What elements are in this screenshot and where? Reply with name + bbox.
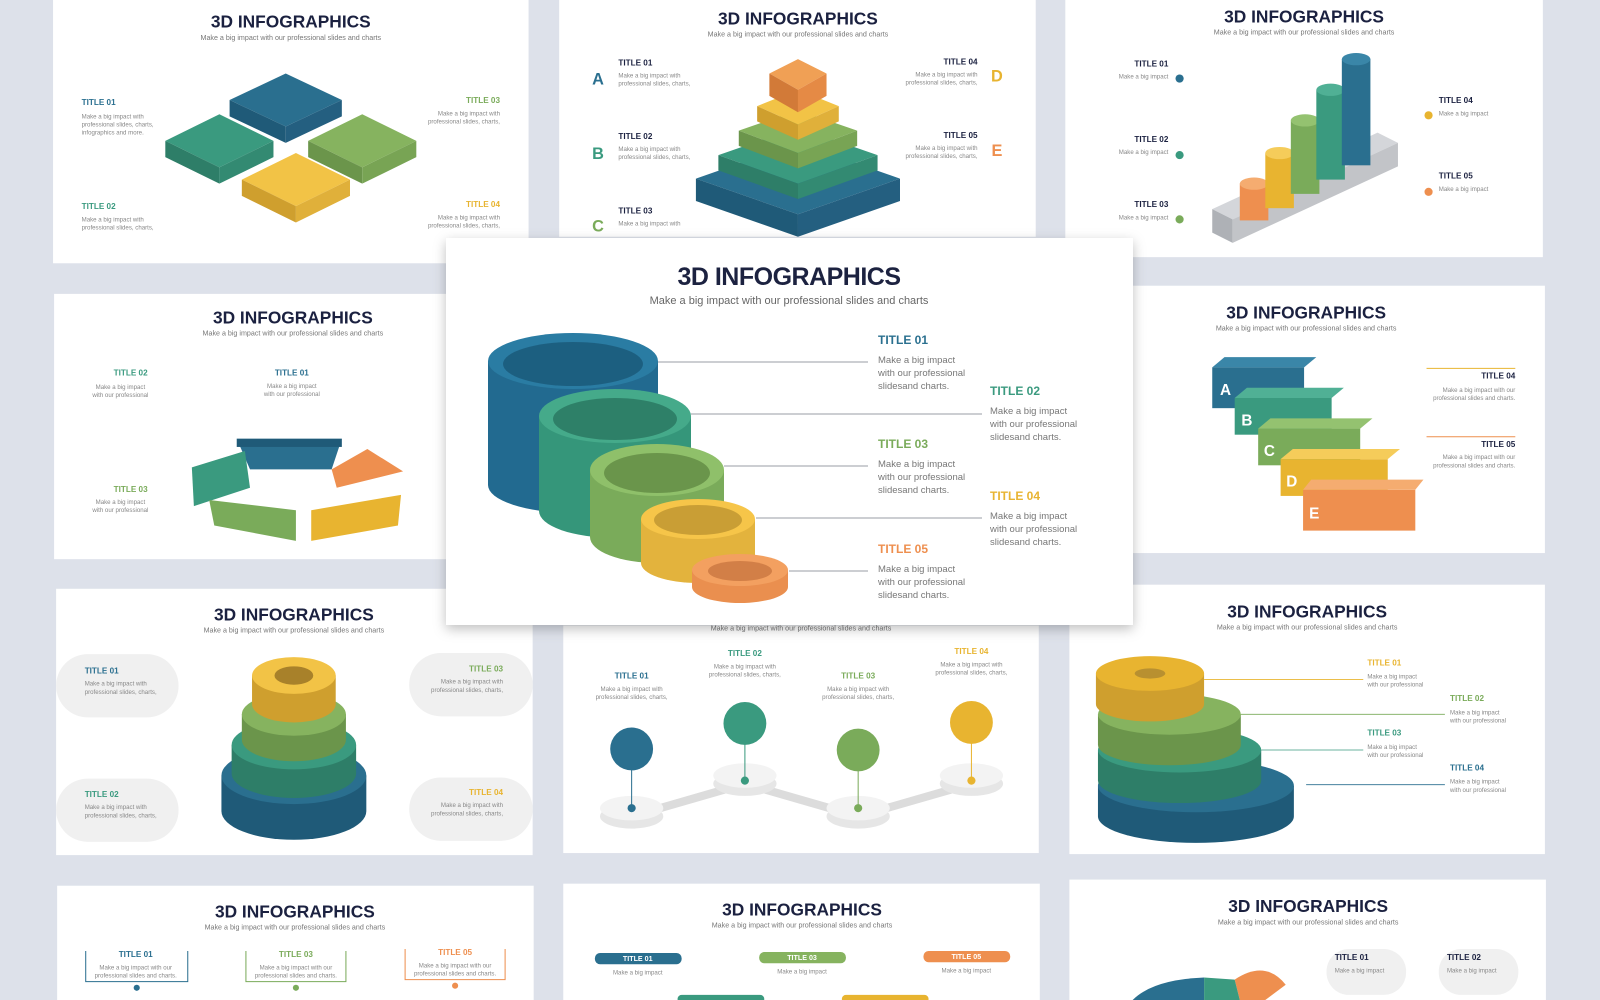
- panel: timeline slide: TITLE 04: [954, 647, 989, 656]
- panel: bottom-left slide: Make a big impact with our: [419, 962, 491, 969]
- panel: bar cylinders slide: TITLE 02: [1134, 135, 1169, 144]
- panel: pyramid slide: professional slides, charts,: [906, 80, 978, 87]
- panel: bottom-middle slide: 3D INFOGRAPHICS: [722, 899, 882, 919]
- panel: bottom-right slide: [1069, 880, 1546, 1000]
- panel: timeline slide: Make a big impact with: [827, 686, 889, 693]
- panel: bottom-left slide: Make a big impact with our: [99, 964, 172, 971]
- panel: bottom-left slide: professional slides and charts.: [255, 973, 337, 980]
- text: title 05: with our professional: [877, 577, 965, 588]
- text: title 05: TITLE 05: [878, 542, 928, 556]
- text: title 04: with our professional: [989, 524, 1077, 535]
- panel: timeline slide: TITLE 02: [728, 649, 762, 658]
- cylinder 1: [488, 333, 658, 513]
- panel: stacked discs slide: 3D INFOGRAPHICS: [1227, 601, 1387, 621]
- panel: steps slide: TITLE 04: [1481, 372, 1516, 381]
- panel: bottom-middle slide: [563, 884, 1040, 1000]
- panel: bottom-left slide: [57, 886, 534, 1000]
- panel: bar cylinders slide: Make a big impact: [1119, 149, 1169, 156]
- panel: steps slide: Make a big impact with our: [1443, 454, 1515, 461]
- panel: ring stack slide: TITLE 01: [85, 666, 119, 675]
- panel: puzzle slide: Make a big impact with: [438, 110, 500, 117]
- panel: bar cylinders slide: TITLE 01: [1134, 59, 1169, 68]
- panel: pyramid slide: [559, 0, 1036, 237]
- panel: puzzle slide: TITLE 02: [82, 202, 116, 211]
- panel: pyramid slide: TITLE 05: [944, 131, 978, 140]
- panel: pyramid slide: D: [991, 68, 1003, 86]
- panel: timeline slide: TITLE 01: [615, 672, 649, 681]
- panel: stacked discs slide: TITLE 02: [1450, 694, 1484, 703]
- text: title 04: [989, 489, 1077, 548]
- panel: bottom-right slide: TITLE 02: [1447, 953, 1481, 962]
- subtitle: Make a big impact with our professional slides and charts: [650, 295, 929, 307]
- text: title 05: Make a big impact: [878, 564, 955, 575]
- panel: bar cylinders slide: TITLE 04: [1439, 96, 1473, 105]
- panel: ring stack slide: 3D INFOGRAPHICS: [214, 604, 374, 624]
- panel: ring stack slide: TITLE 02: [85, 790, 119, 799]
- panel: timeline slide: professional slides, charts,: [709, 672, 781, 679]
- panel: bar cylinders slide: Make a big impact: [1119, 214, 1169, 221]
- panel: ring stack slide: professional slides, charts,: [431, 810, 503, 817]
- panel: pyramid slide: Make a big impact with: [915, 72, 978, 79]
- panel: pyramid slide: Make a big impact with: [618, 221, 681, 228]
- panel: pyramid slide: B: [592, 145, 604, 163]
- panel: bottom-left slide: professional slides and charts.: [414, 971, 496, 978]
- panel: steps slide: professional slides and charts.: [1433, 462, 1516, 469]
- panel: timeline slide: Make a big impact with: [940, 661, 1002, 668]
- panel: pyramid slide: TITLE 02: [618, 132, 653, 141]
- panel: bar cylinders slide: Make a big impact: [1439, 186, 1489, 193]
- panel: steps slide: Make a big impact with our: [1443, 387, 1515, 394]
- panel: stacked discs slide: Make a big impact: [1367, 744, 1417, 751]
- panel: stacked discs slide: Make a big impact: [1450, 779, 1500, 786]
- panel: stacked discs slide: with our professional: [1449, 717, 1506, 724]
- panel: donut slide: 3D INFOGRAPHICS: [213, 307, 373, 327]
- connector lines: [658, 362, 982, 571]
- panel: ring stack slide: Make a big impact with: [85, 804, 147, 811]
- panel: bottom-right slide: Make a big impact with our professional slides and charts: [1218, 918, 1399, 926]
- panel: steps slide: 3D INFOGRAPHICS: [1226, 302, 1386, 322]
- panel: pyramid slide: E: [991, 142, 1002, 160]
- panel: steps slide: A: [1220, 382, 1231, 399]
- panel: timeline slide: professional slides, charts,: [596, 694, 668, 701]
- text: title 04: Make a big impact: [990, 511, 1067, 522]
- text: title 02: slidesand charts.: [990, 432, 1061, 443]
- panel: bar cylinders slide: 3D INFOGRAPHICS: [1224, 6, 1384, 26]
- panel: puzzle slide: [53, 0, 529, 263]
- panel: ring stack slide: [56, 589, 533, 855]
- panel: bottom-right slide: 3D INFOGRAPHICS: [1228, 896, 1388, 916]
- panel: pyramid slide: professional slides, charts,: [618, 154, 691, 161]
- panel: bottom-left slide: TITLE 05: [438, 948, 473, 957]
- text: title 04: TITLE 04: [990, 489, 1040, 503]
- panel: bar cylinders slide: TITLE 05: [1439, 172, 1473, 181]
- panel: timeline slide: [563, 625, 1039, 853]
- panel: puzzle slide: Make a big impact with: [438, 214, 500, 221]
- panel: stacked discs slide: with our professional: [1449, 787, 1506, 794]
- panel: bottom-middle slide: Make a big impact: [777, 968, 827, 975]
- panel: ring stack slide: Make a big impact with our professional slides and charts: [204, 627, 385, 635]
- panel: stacked discs slide: Make a big impact with our professional slides and charts: [1217, 624, 1398, 632]
- text: title 03: [877, 437, 965, 496]
- panel: bottom-right slide: TITLE 01: [1335, 953, 1369, 962]
- panel: bottom-middle slide: TITLE 03: [787, 954, 817, 962]
- panel: donut slide: [54, 294, 531, 559]
- panel: pyramid slide: professional slides, charts,: [618, 81, 691, 88]
- panel: pyramid slide: TITLE 04: [944, 57, 978, 66]
- panel: bottom-left slide: professional slides and charts.: [95, 973, 177, 980]
- panel: bar cylinders slide: Make a big impact: [1439, 110, 1489, 117]
- text: title 01: with our professional: [877, 368, 965, 379]
- panel: bottom-middle slide: Make a big impact with our professional slides and charts: [712, 922, 893, 930]
- panel: steps slide: C: [1264, 443, 1275, 460]
- panel: puzzle slide: Make a big impact with: [82, 113, 144, 120]
- panel: donut slide: Make a big impact: [267, 383, 317, 390]
- panel: donut slide: TITLE 01: [275, 369, 309, 378]
- panel: bar cylinders slide: Make a big impact: [1119, 74, 1169, 81]
- panel: donut slide: Make a big impact with our professional slides and charts: [203, 330, 384, 338]
- panel: stacked discs slide: with our professional: [1366, 682, 1423, 689]
- panel: donut slide: Make a big impact: [96, 499, 145, 506]
- panel: puzzle slide: Make a big impact with: [82, 216, 144, 223]
- panel: pyramid slide: C: [592, 218, 604, 236]
- panel: bottom-left slide: TITLE 03: [279, 950, 313, 959]
- panel: pyramid slide: Make a big impact with: [915, 145, 978, 152]
- text: title 01: [877, 333, 965, 392]
- panel: donut slide: TITLE 02: [114, 369, 148, 378]
- panel: pyramid slide: Make a big impact with our professional slides and charts: [708, 31, 889, 39]
- text: title 03: Make a big impact: [878, 459, 955, 470]
- panel: timeline slide: TITLE 03: [841, 672, 876, 681]
- panel: bottom-right slide: Make a big impact: [1335, 967, 1385, 974]
- panel: bottom-left slide: Make a big impact with our: [260, 964, 332, 971]
- panel: pyramid slide: Make a big impact with: [618, 146, 681, 153]
- text: title 04: slidesand charts.: [990, 537, 1061, 548]
- panel: steps slide: TITLE 05: [1481, 440, 1516, 449]
- panel: steps slide: B: [1241, 413, 1252, 430]
- panel: donut slide: with our professional: [263, 391, 320, 398]
- panel: ring stack slide: TITLE 04: [469, 788, 504, 797]
- panel: pyramid slide: TITLE 01: [618, 58, 653, 67]
- panel: bar cylinders slide: Make a big impact with our professional slides and charts: [1214, 29, 1395, 37]
- panel: donut slide: with our professional: [91, 392, 148, 399]
- panel: steps slide: professional slides and charts.: [1433, 395, 1516, 402]
- panel: puzzle slide: TITLE 01: [82, 98, 116, 107]
- text: title 01: slidesand charts.: [878, 381, 949, 392]
- panel: bottom-left slide: 3D INFOGRAPHICS: [215, 901, 375, 921]
- panel: ring stack slide: professional slides, charts,: [85, 689, 157, 696]
- panel: ring stack slide: professional slides, charts,: [85, 812, 157, 819]
- panel: stacked discs slide: with our professional: [1366, 752, 1423, 759]
- panel: steps slide: Make a big impact with our professional slides and charts: [1216, 325, 1397, 333]
- panel: donut slide: Make a big impact: [96, 384, 145, 391]
- panel: stacked discs slide: Make a big impact: [1450, 709, 1500, 716]
- text: title 03: with our professional: [877, 472, 965, 483]
- panel: timeline slide: professional slides, charts,: [822, 694, 894, 701]
- panel: puzzle slide: TITLE 03: [466, 96, 500, 105]
- panel: pyramid slide: professional slides, charts,: [906, 153, 978, 160]
- panel: timeline slide: Make a big impact with: [714, 663, 776, 670]
- panel: donut slide: with our professional: [91, 507, 148, 514]
- panel: timeline slide: Make a big impact with our professional slides and charts: [711, 625, 892, 633]
- panel: bar cylinders slide: [1065, 0, 1543, 257]
- text: title 05: slidesand charts.: [878, 590, 949, 601]
- panel: pyramid slide: A: [592, 71, 604, 89]
- panel: bar cylinders slide: TITLE 03: [1134, 200, 1169, 209]
- panel: ring stack slide: TITLE 03: [469, 664, 504, 673]
- panel: bottom-right slide: Make a big impact: [1447, 967, 1497, 974]
- panel: main featured slide (cylinders): [446, 238, 1133, 625]
- panel: stacked discs slide: [1069, 585, 1545, 854]
- cylinder 5: [692, 554, 788, 603]
- panel: puzzle slide: 3D INFOGRAPHICS: [211, 12, 371, 32]
- text: title 02: TITLE 02: [990, 384, 1040, 398]
- panel: puzzle slide: professional slides, charts,: [428, 118, 500, 125]
- text: title 05: [877, 542, 965, 601]
- text: title 02: [989, 384, 1077, 443]
- panel: pyramid slide: TITLE 03: [618, 206, 653, 215]
- panel: stacked discs slide: TITLE 01: [1367, 658, 1402, 667]
- panel: bottom-left slide: TITLE 01: [119, 950, 153, 959]
- panel: ring stack slide: professional slides, charts,: [431, 687, 503, 694]
- cylinder 4: [641, 499, 755, 583]
- panel: timeline slide: Make a big impact with: [601, 686, 663, 693]
- panel: ring stack slide: Make a big impact with: [441, 802, 503, 809]
- panel: ring stack slide: Make a big impact with: [85, 681, 147, 688]
- text: title 03: TITLE 03: [878, 437, 928, 451]
- panel: puzzle slide: TITLE 04: [466, 200, 500, 209]
- panel: puzzle slide: Make a big impact with our professional slides and charts: [201, 34, 382, 42]
- text: title 02: with our professional: [989, 419, 1077, 430]
- panel: donut slide: TITLE 03: [114, 485, 148, 494]
- panel: puzzle slide: professional slides, charts,: [428, 223, 500, 230]
- panel: stacked discs slide: TITLE 03: [1367, 729, 1402, 738]
- text: title 02: Make a big impact: [990, 406, 1067, 417]
- panel: bottom-middle slide: Make a big impact: [942, 967, 991, 974]
- panel: stacked discs slide: TITLE 04: [1450, 763, 1484, 772]
- panel: stacked discs slide: Make a big impact: [1367, 674, 1417, 681]
- panel: bottom-middle slide: TITLE 05: [951, 953, 981, 961]
- text: title 03: slidesand charts.: [878, 485, 949, 496]
- panel: ring stack slide: Make a big impact with: [441, 679, 503, 686]
- text: title 01: Make a big impact: [878, 355, 955, 366]
- panel: steps slide: E: [1309, 505, 1319, 522]
- panel: pyramid slide: Make a big impact with: [618, 73, 681, 80]
- panel: timeline slide: professional slides, charts,: [935, 669, 1008, 676]
- panel: puzzle slide: professional slides, charts,: [82, 122, 154, 129]
- text: title 01: TITLE 01: [878, 333, 928, 347]
- cylinder 3: [590, 444, 724, 563]
- panel: steps slide: D: [1286, 474, 1297, 491]
- title: 3D INFOGRAPHICS: [677, 263, 901, 291]
- cylinder 2: [539, 389, 691, 538]
- panel: puzzle slide: infographics and more.: [82, 130, 144, 137]
- panel: bottom-middle slide: TITLE 01: [623, 955, 653, 963]
- panel: steps slide: [1133, 286, 1545, 553]
- panel: pyramid slide: 3D INFOGRAPHICS: [718, 8, 878, 28]
- panel: bottom-middle slide: Make a big impact: [613, 969, 663, 976]
- panel: bottom-left slide: Make a big impact with our professional slides and charts: [205, 924, 386, 932]
- panel: puzzle slide: professional slides, charts,: [82, 225, 154, 232]
